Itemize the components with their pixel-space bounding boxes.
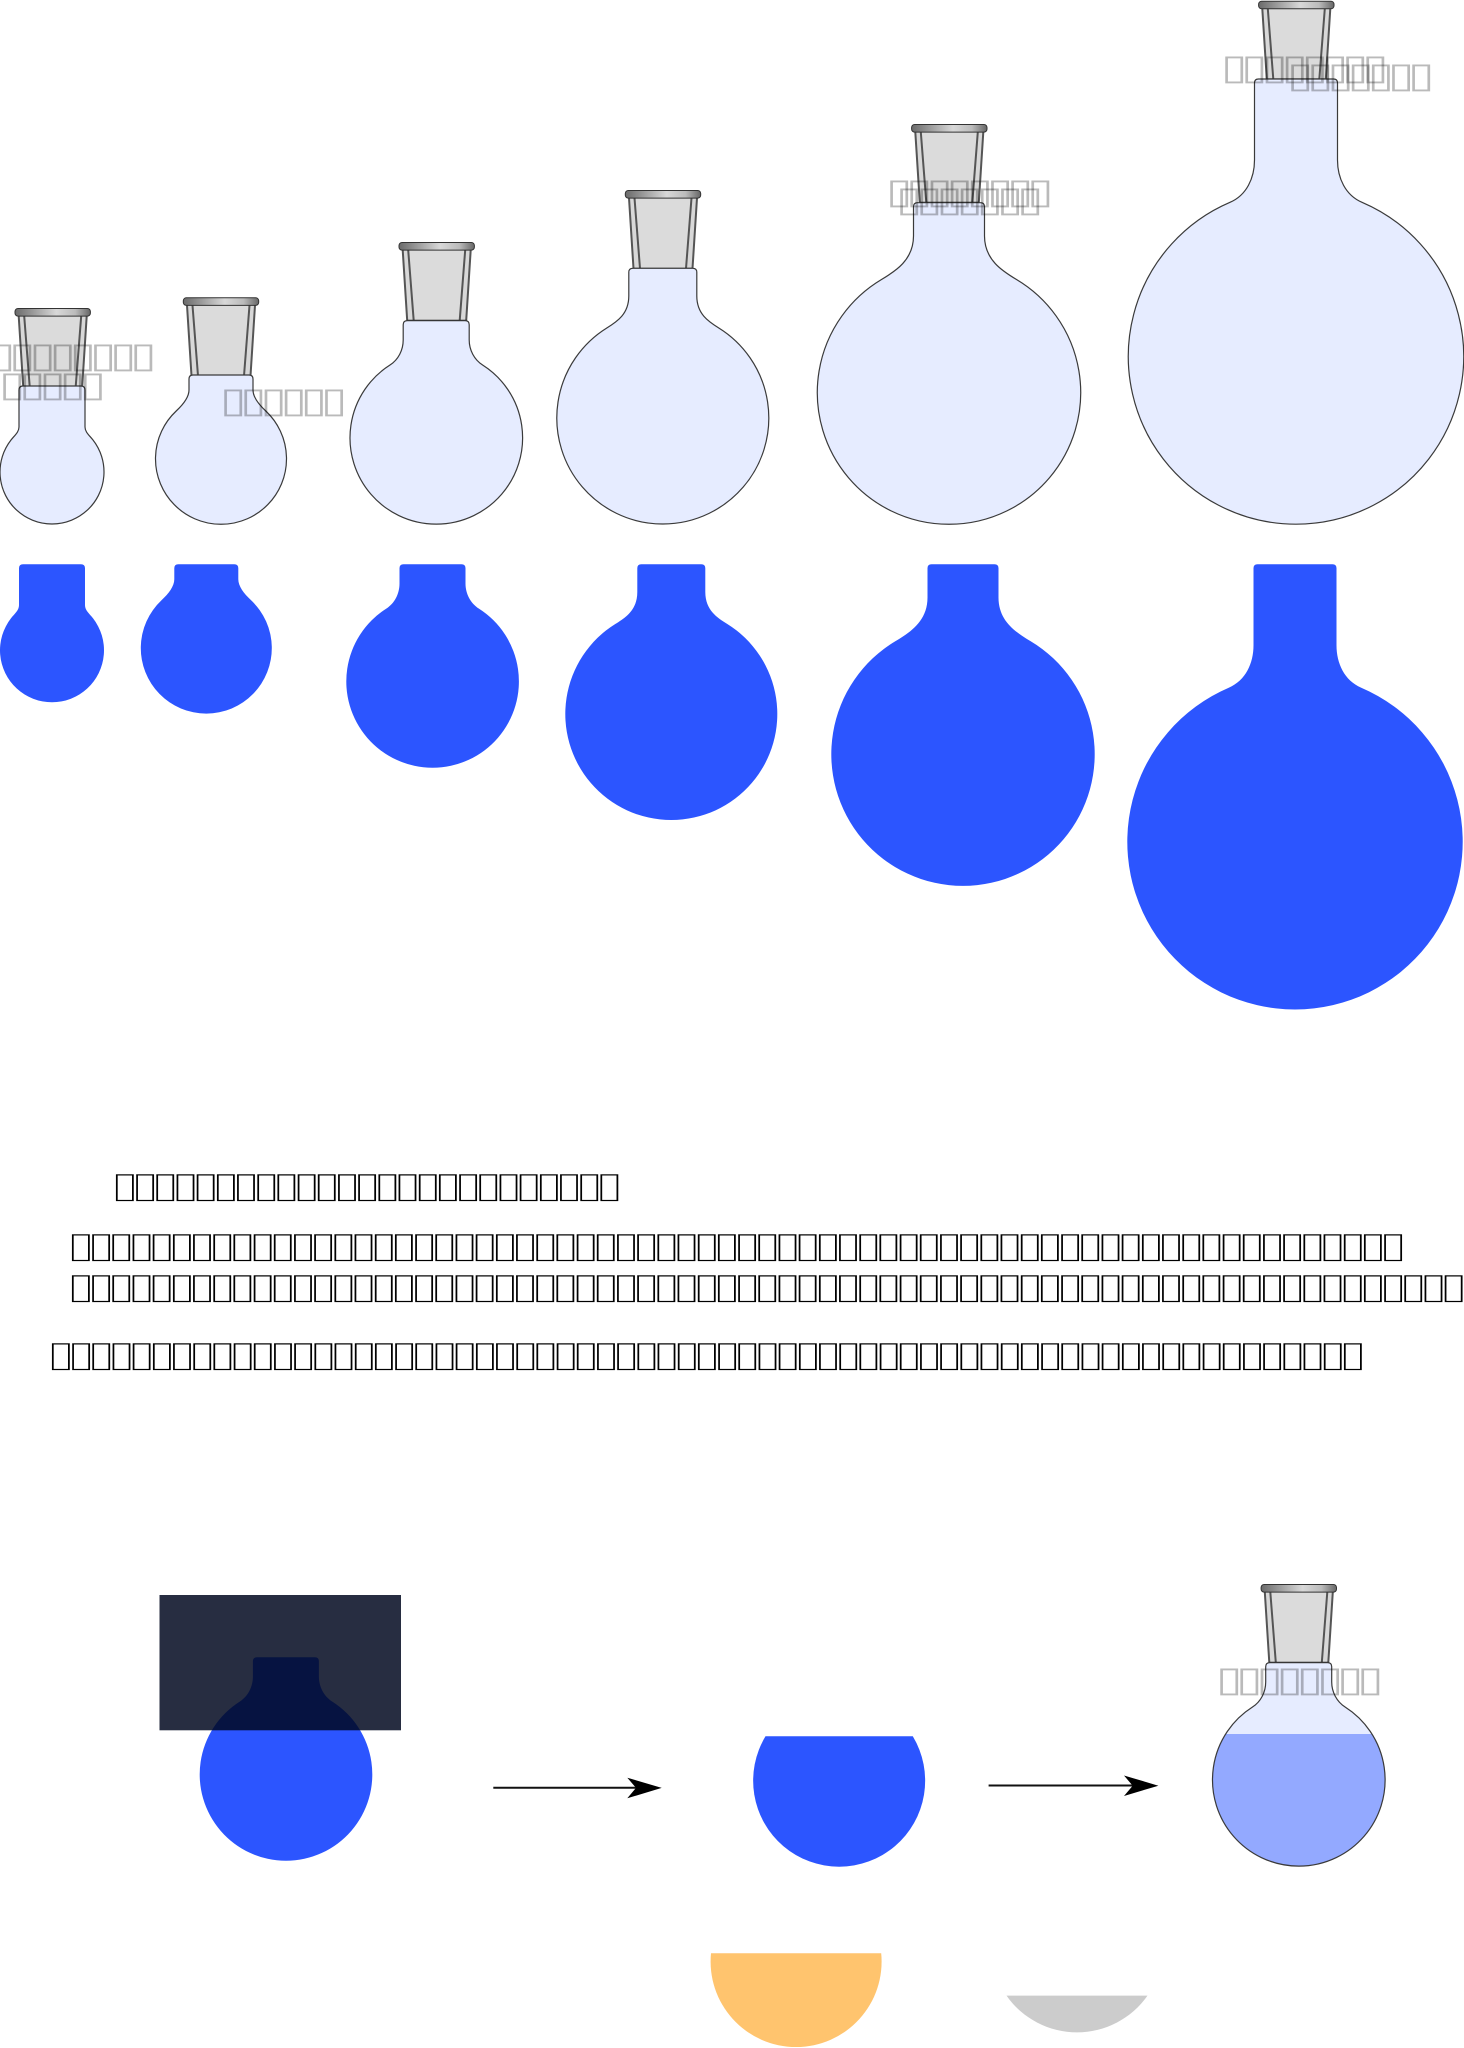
paragraph line 1: ▯▯▯▯▯▯▯▯▯▯▯▯▯▯▯▯▯▯▯▯▯▯▯▯▯▯▯▯▯▯▯▯▯▯▯▯▯▯▯▯▯▯▯▯▯▯▯▯▯▯▯▯▯▯▯▯▯▯▯▯▯▯▯▯▯▯ bbox=[66, 1223, 1403, 1266]
blue silhouette 6 bbox=[1127, 564, 1463, 1009]
blue silhouette 1 bbox=[0, 564, 104, 702]
paragraph line 3: ▯▯▯▯▯▯▯▯▯▯▯▯▯▯▯▯▯▯▯▯▯▯▯▯▯▯▯▯▯▯▯▯▯▯▯▯▯▯▯▯▯▯▯▯▯▯▯▯▯▯▯▯▯▯▯▯▯▯▯▯▯▯▯▯▯ bbox=[46, 1332, 1363, 1375]
flask 1 second label: ▯▯▯▯▯ bbox=[0, 364, 103, 404]
liquid flask label: ▯▯▯▯▯▯▯▯ bbox=[1216, 1659, 1380, 1699]
flask 5 outline bbox=[817, 124, 1081, 524]
flask 5 label: ▯▯▯▯▯▯▯▯ bbox=[886, 171, 1050, 211]
blue silhouette 4 bbox=[565, 564, 777, 820]
heading: ▯▯▯▯▯▯▯▯▯▯▯▯▯▯▯▯▯▯▯▯▯▯▯▯▯ bbox=[110, 1163, 619, 1206]
blue silhouette 3 bbox=[346, 564, 519, 768]
paragraph line 2: ▯▯▯▯▯▯▯▯▯▯▯▯▯▯▯▯▯▯▯▯▯▯▯▯▯▯▯▯▯▯▯▯▯▯▯▯▯▯▯▯▯▯▯▯▯▯▯▯▯▯▯▯▯▯▯▯▯▯▯▯▯▯▯▯▯▯▯▯▯ bbox=[66, 1264, 1464, 1307]
grey cap segment bbox=[1006, 1996, 1148, 2032]
flask 2 label: ▯▯▯▯▯▯ bbox=[220, 380, 344, 420]
arrow 1 bbox=[493, 1778, 662, 1798]
blue flask with dark mask bbox=[160, 1595, 401, 1861]
arrow 2 bbox=[989, 1776, 1158, 1796]
blue silhouette 5 bbox=[831, 564, 1095, 886]
flask 6 outline bbox=[1128, 1, 1464, 524]
flask 5 second label: ▯▯▯▯▯▯▯ bbox=[896, 179, 1040, 219]
flask 3 outline bbox=[350, 242, 523, 524]
flask with liquid bbox=[1212, 1584, 1386, 1867]
flask 6 second label: ▯▯▯▯▯▯▯ bbox=[1287, 55, 1431, 95]
blue silhouette 2 bbox=[141, 564, 272, 714]
flask 2 outline bbox=[155, 298, 286, 524]
flask 1 outline bbox=[0, 308, 104, 524]
flask 4 outline bbox=[557, 190, 769, 524]
flask 6 label: ▯▯▯▯▯▯▯▯ bbox=[1221, 47, 1385, 87]
orange bowl segment bbox=[711, 1953, 882, 2047]
blue cut flask bottom bbox=[753, 1736, 925, 1867]
